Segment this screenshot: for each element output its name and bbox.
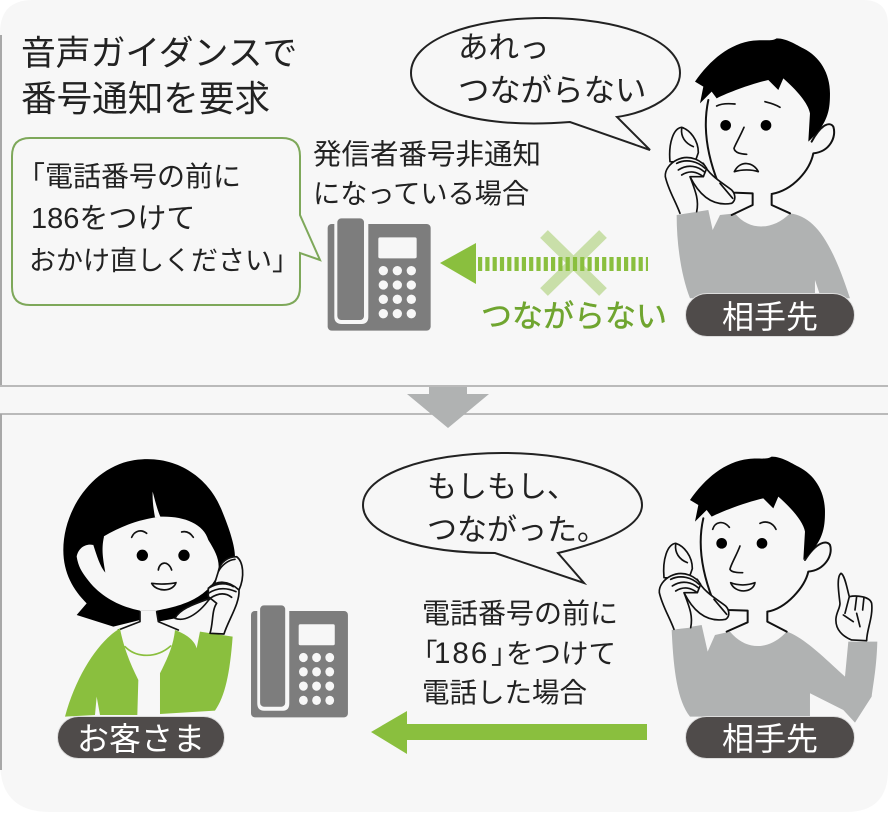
label: recipient (top): 相手先 [722,299,818,335]
speech bubble: not connecting: あれっ [458,31,550,65]
person: customer [63,459,243,717]
person: recipient, pointing [659,457,877,723]
text: dialing 186 case: 電話番号の前に [422,598,618,629]
arrow: down between panels [407,387,489,428]
person: recipient, worried [665,38,850,298]
icon: desk phone (top) [328,218,431,331]
speech bubble: connected: つながった。 [427,514,607,547]
text: dialing 186 case: 「 [410,638,438,669]
text: caller ID withheld case: 発信者番号非通知 [313,139,541,171]
label: recipient (top) [686,294,854,336]
speech bubble: not connecting: つながらない [458,73,646,108]
icon: handset and hand [175,557,243,634]
callout: voice guidance [12,138,320,305]
title: 音声ガイダンスで [21,34,297,73]
icon: desk phone (bottom) [251,605,348,717]
icon: handset and hand [659,543,729,629]
text: dialing 186 case: 186 [434,637,489,670]
label: recipient (bottom): 相手先 [722,721,818,757]
speech bubble: connected [363,453,642,583]
label: not connecting: つながらない [481,299,667,334]
speech bubble: connected: もしもし、 [427,471,577,504]
label: recipient (bottom) [686,716,854,758]
speech bubble: not connecting [411,18,680,150]
label: customer [58,716,224,758]
label: customer: お客さま [77,721,205,757]
text: dialing 186 case: をつけて [506,638,616,669]
callout: voice guidance: 「電話番号の前に [17,161,241,192]
text: dialing 186 case: 電話した場合 [422,677,587,708]
arrow: blocked call [440,234,648,292]
title: 番号通知を要求 [21,79,270,119]
callout: voice guidance: おかけ直しください」 [29,246,299,276]
icon: pointing hand [836,573,872,641]
text: dialing 186 case: 」 [491,638,518,669]
text: caller ID withheld case: になっている場合 [313,178,529,209]
icon: handset and hand [665,127,735,213]
arrow: connected call [371,711,647,754]
callout: voice guidance: 186をつけて [31,203,195,235]
